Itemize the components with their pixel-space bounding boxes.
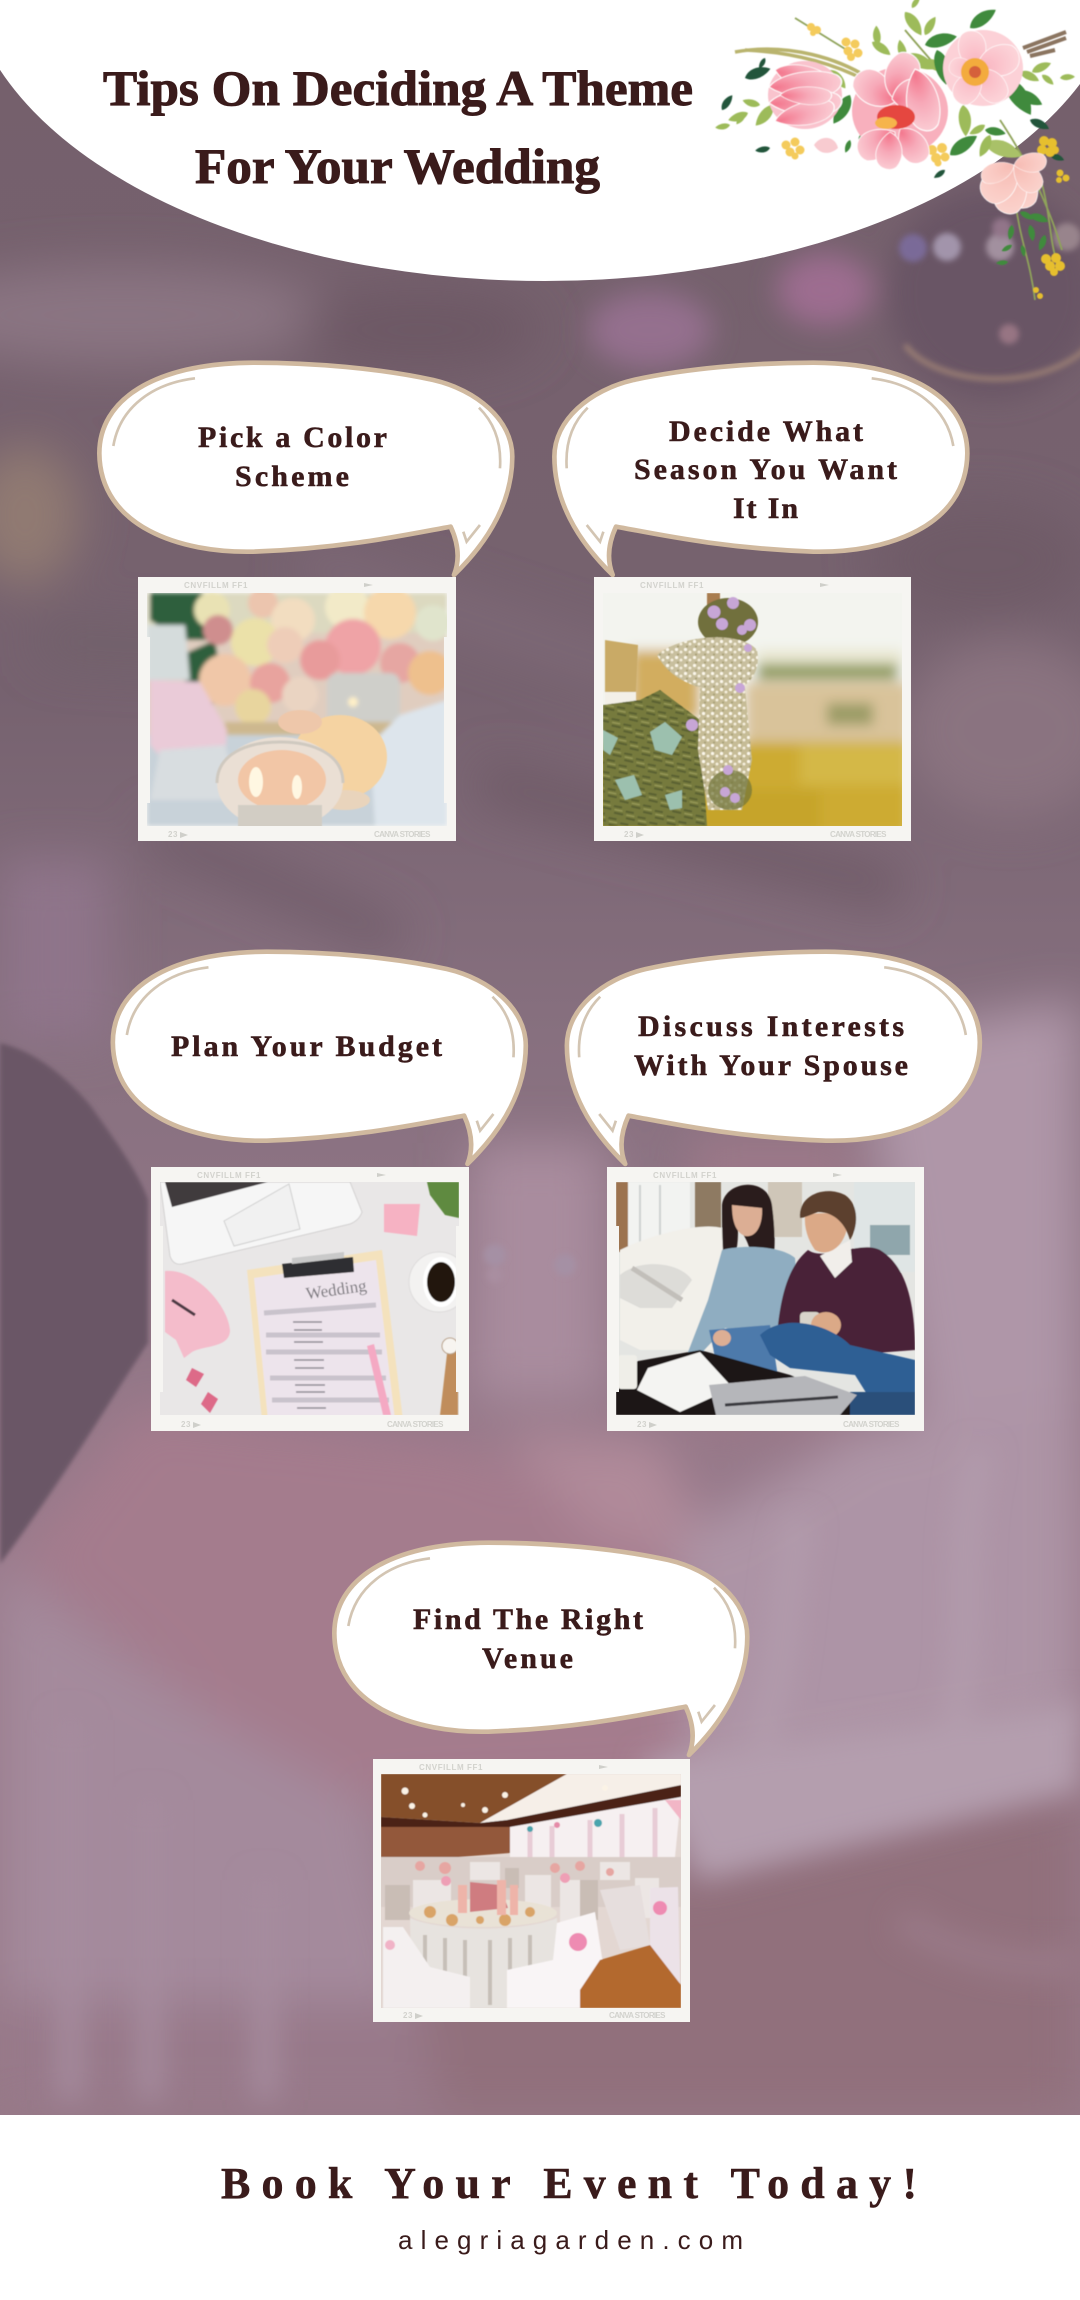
film frame labels: CNVFILLM FF1 (197, 1171, 261, 1180)
heading: decide what season you want it in: Season You Want (634, 453, 897, 486)
film frame labels: 23 (181, 1420, 191, 1429)
photo: budget planner flat lay: Wedding (305, 1276, 368, 1303)
film frame labels (181, 1171, 444, 1429)
website: alegriagarden.com (398, 2225, 743, 2255)
film frame labels: CANVA STORIES (843, 1420, 900, 1429)
speech bubble 5 (334, 1543, 747, 1755)
film frame labels: CNVFILLM FF1 (419, 1763, 483, 1772)
photo: couple on a sofa with paperwork (616, 1182, 915, 1415)
speech bubble 3 (113, 952, 526, 1164)
film frame labels: CANVA STORIES (374, 830, 431, 839)
icon: small hanging flower (974, 150, 1048, 215)
film frame labels: CNVFILLM FF1 (640, 581, 704, 590)
icon: left peony (768, 58, 843, 133)
icon: watercolor floral corner (715, 0, 1075, 300)
header white curved panel (0, 0, 1080, 281)
speech bubble 4 (567, 952, 980, 1164)
panel: tip 2 decide what season (554, 363, 967, 841)
title: For Your Wedding (195, 138, 600, 194)
film frame labels: 23 (637, 1420, 647, 1429)
film frame labels: 23 (168, 830, 178, 839)
heading: decide what season you want it in: It In (733, 492, 798, 525)
photo frame 3 (151, 1167, 469, 1431)
heading: discuss interests with your spouse: With Your Spouse (634, 1049, 908, 1082)
heading: find the right venue: Find The Right (413, 1603, 643, 1636)
panel: tip 3 plan your budget (113, 952, 526, 1431)
film frame labels: 23 (624, 830, 634, 839)
speech bubble 2 (554, 363, 967, 575)
photo: outdoor floral arch in a field (603, 593, 902, 826)
film frame labels: CANVA STORIES (387, 1420, 444, 1429)
panel: tip 5 find the right venue (334, 1543, 747, 2022)
film frame labels (637, 1171, 900, 1429)
heading: find the right venue: Venue (482, 1642, 573, 1675)
call to action: Book Your Event Today! (221, 2159, 917, 2208)
film frame labels (624, 581, 887, 839)
film frame labels: CNVFILLM FF1 (653, 1171, 717, 1180)
heading: find the right venue (413, 1603, 643, 1675)
title (103, 60, 693, 194)
heading: decide what season you want it in (634, 415, 897, 525)
heading: discuss interests with your spouse (634, 1010, 908, 1082)
heading: discuss interests with your spouse: Discuss Interests (638, 1010, 904, 1043)
photo frame 5 (373, 1759, 690, 2022)
heading: pick a color scheme (198, 421, 387, 493)
footer panel (0, 2115, 1080, 2300)
photo frame 4 (607, 1167, 924, 1431)
photo frame 1 (138, 577, 456, 841)
film frame labels (168, 581, 431, 839)
film frame labels: 23 (403, 2011, 413, 2020)
title: Tips On Deciding A Theme (103, 60, 693, 116)
heading: pick a color scheme: Pick a Color (198, 421, 387, 454)
panel: tip 1 pick a color scheme (99, 363, 512, 841)
film frame labels (403, 1763, 666, 2020)
film frame labels: CANVA STORIES (609, 2011, 666, 2020)
heading: decide what season you want it in: Decide What (669, 415, 863, 448)
photo: budget planner flat lay (160, 1182, 469, 1420)
panel: tip 4 discuss interests (567, 952, 980, 1431)
photo frame 2 (594, 577, 911, 841)
icon: centre peony (847, 48, 948, 170)
film frame labels: CNVFILLM FF1 (184, 581, 248, 590)
heading: plan your budget: Plan Your Budget (171, 1030, 442, 1063)
heading: pick a color scheme: Scheme (235, 460, 349, 493)
icon: right flower (943, 28, 1025, 109)
film frame labels: CANVA STORIES (830, 830, 887, 839)
speech bubble 1 (99, 363, 512, 575)
photo: candle and roses (147, 585, 452, 829)
photo: banquet hall (381, 1774, 681, 2008)
